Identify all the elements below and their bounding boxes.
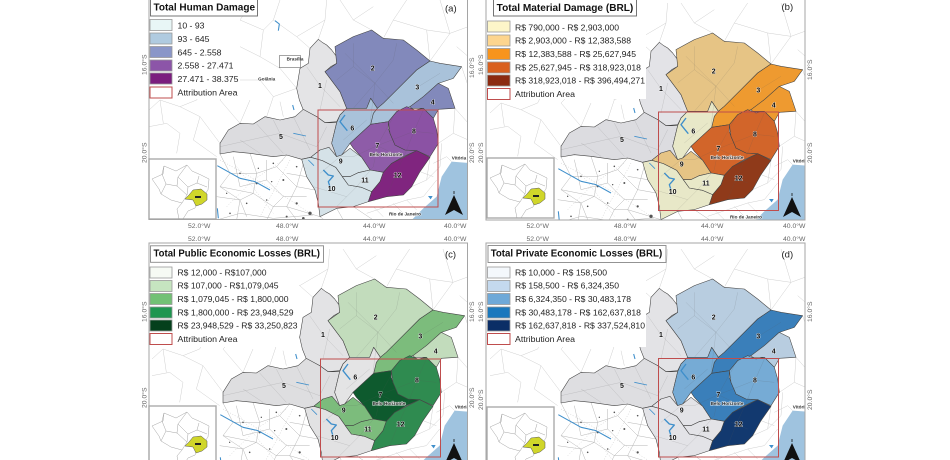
region numbers c: 7 (378, 392, 382, 399)
region numbers b: 6 (691, 129, 695, 136)
axis labels a: 20.0°S (140, 142, 148, 163)
region numbers c: 8 (415, 378, 419, 385)
city labels a (258, 57, 467, 217)
city labels a: Rio de Janeiro (389, 212, 421, 217)
city labels a: Brasília (287, 57, 304, 62)
panel letter b: (b) (782, 2, 793, 13)
title a: Total Human Damage (154, 2, 255, 13)
panel d: total private economic losses (477, 235, 814, 460)
region numbers d: 10 (669, 435, 677, 442)
title b (494, 0, 636, 16)
inset locator b (487, 158, 554, 218)
north arrow d (783, 439, 801, 460)
axis labels c: 16.0°S (468, 301, 476, 322)
axis labels a: 20.0°S (468, 142, 476, 163)
legend d: R$ 10,000 - R$ 158,500 (515, 268, 607, 278)
axis labels a: 16.0°S (468, 57, 476, 78)
axis labels b (477, 54, 814, 230)
legend d: R$ 6,324,350 - R$ 30,483,178 (515, 294, 631, 304)
legend b: R$ 318,923,018 - R$ 396,494,271 (515, 76, 645, 86)
panel c: total public economic losses (140, 235, 476, 460)
region numbers d (620, 315, 776, 442)
city labels b: Rio de Janeiro (730, 215, 762, 220)
legend c: R$ 12,000 - R$107,000 (178, 268, 267, 278)
axis labels d: 40.0°W (783, 235, 806, 243)
region numbers a: 9 (339, 159, 343, 166)
legend c (149, 262, 299, 347)
region numbers d: 11 (702, 426, 710, 433)
region numbers a: 5 (279, 134, 283, 141)
axis labels b: 20.0°S (477, 142, 485, 163)
region numbers d: 4 (772, 348, 776, 355)
region numbers d: 5 (620, 383, 624, 390)
legend c: Attribution Area (178, 334, 238, 344)
region numbers b: 4 (772, 102, 776, 109)
attribution area b (658, 112, 778, 210)
legend a: 10 - 93 (178, 21, 205, 31)
axis labels d: 48.0°W (614, 235, 637, 243)
axis labels a: 48.0°W (276, 222, 299, 230)
region numbers a: 7 (375, 143, 379, 150)
region numbers d: 6 (691, 375, 695, 382)
region numbers c: 2 (374, 315, 378, 322)
axis labels b: 44.0°W (701, 222, 724, 230)
legend d: R$ 30,483,178 - R$ 162,637,818 (515, 307, 641, 317)
axis labels d: 52.0°W (526, 235, 549, 243)
axis labels a (140, 54, 476, 230)
axis labels c: 20.0°S (468, 387, 476, 408)
panel a: total human damage (140, 0, 476, 230)
north arrow b (783, 193, 801, 217)
region numbers d: 1 (659, 332, 663, 339)
axis labels b: 16.0°S (806, 59, 814, 80)
region numbers d: 7 (716, 392, 720, 399)
legend b (486, 0, 646, 100)
title d (488, 246, 666, 262)
region numbers a: 8 (412, 129, 416, 136)
frame c (149, 243, 468, 460)
region numbers a: 2 (371, 66, 375, 73)
legend b: Attribution Area (515, 89, 575, 99)
inset locator a (149, 159, 216, 219)
map d (486, 243, 811, 460)
region numbers c: 6 (353, 375, 357, 382)
city labels a: Vitória (452, 155, 467, 160)
region numbers b: 2 (712, 69, 716, 76)
title b: Total Material Damage (BRL) (497, 3, 633, 14)
axis labels a: 16.0°S (140, 54, 148, 75)
legend d (486, 262, 646, 347)
region numbers c: 11 (364, 426, 372, 433)
region numbers b: 5 (620, 137, 624, 144)
city labels d (711, 401, 808, 409)
legend b: R$ 2,903,000 - R$ 12,383,588 (515, 36, 631, 46)
title c: Total Public Economic Losses (BRL) (154, 248, 320, 260)
city labels d: Belo Horizonte (711, 401, 744, 406)
inset locator c (149, 406, 216, 460)
city labels b (711, 155, 808, 220)
axis labels d: 20.0°S (477, 389, 485, 410)
region numbers c: 10 (331, 435, 339, 442)
legend d: R$ 162,637,818 - R$ 337,524,810 (515, 321, 645, 331)
title c (150, 246, 324, 262)
city labels d: Vitória (793, 404, 808, 409)
north arrow a (445, 191, 463, 215)
region numbers b: 10 (669, 189, 677, 196)
frame b (486, 0, 805, 220)
axis labels b: 20.0°S (806, 142, 814, 163)
region numbers d: 2 (712, 315, 716, 322)
legend d: R$ 158,500 - R$ 6,324,350 (515, 281, 619, 291)
attribution area d (658, 358, 778, 457)
region numbers d: 3 (756, 334, 760, 341)
axis labels a: 44.0°W (363, 222, 386, 230)
region numbers d: 9 (680, 408, 684, 415)
region numbers d: 8 (753, 378, 757, 385)
city labels b: Belo Horizonte (711, 155, 744, 160)
panel letter c: (c) (445, 250, 456, 260)
frame d (486, 243, 805, 460)
legend b: R$ 790,000 - R$ 2,903,000 (515, 22, 619, 32)
legend a: 27.471 - 38.375 (178, 74, 239, 84)
axis labels c: 44.0°W (363, 235, 386, 243)
legend a (149, 0, 240, 99)
map b (486, 0, 811, 225)
region numbers c: 3 (418, 334, 422, 341)
axis labels d (477, 235, 814, 410)
map c (149, 243, 473, 460)
region numbers b: 7 (716, 146, 720, 153)
title d: Total Private Economic Losses (BRL) (491, 248, 662, 260)
attribution area a (318, 110, 438, 207)
legend c: R$ 1,079,045 - R$ 1,800,000 (178, 294, 289, 304)
region fills c (223, 279, 465, 460)
legend a: 93 - 645 (178, 34, 210, 44)
axis labels c: 16.0°S (140, 301, 148, 322)
title a (150, 0, 258, 16)
region numbers b: 11 (702, 180, 710, 187)
region numbers c: 12 (397, 421, 405, 428)
region fills a (220, 30, 462, 217)
region numbers a (279, 66, 435, 193)
inset locator d (487, 407, 554, 460)
region numbers b (620, 69, 776, 196)
panel letter d: (d) (782, 250, 793, 260)
legend c: R$ 23,948,529 - R$ 33,250,823 (178, 321, 298, 331)
region numbers a: 12 (394, 172, 402, 179)
axis labels c: 48.0°W (276, 235, 299, 243)
region numbers b: 3 (756, 88, 760, 95)
city labels c: Belo Horizonte (373, 401, 406, 406)
axis labels c: 20.0°S (140, 387, 148, 408)
region numbers b: 8 (753, 132, 757, 139)
region numbers b: 1 (659, 86, 663, 93)
region numbers c (282, 315, 438, 442)
region numbers d: 12 (735, 421, 743, 428)
legend b: R$ 12,383,588 - R$ 25,627,945 (515, 49, 636, 59)
axis labels d: 44.0°W (701, 235, 724, 243)
axis labels d: 16.0°S (806, 301, 814, 322)
region numbers b: 12 (735, 175, 743, 182)
axis labels b: 52.0°W (526, 222, 549, 230)
axis labels c: 52.0°W (188, 235, 211, 243)
city labels b: Vitória (793, 158, 808, 163)
region fills d (561, 279, 803, 460)
legend c: R$ 1,800,000 - R$ 23,948,529 (178, 307, 294, 317)
axis labels a: 40.0°W (444, 222, 467, 230)
legend b: R$ 25,627,945 - R$ 318,923,018 (515, 62, 641, 72)
axis labels b: 48.0°W (614, 222, 637, 230)
attribution area c (320, 359, 440, 457)
axis labels b: 16.0°S (477, 54, 485, 75)
axis labels d: 20.0°S (806, 389, 814, 410)
north arrow c (445, 439, 463, 460)
region numbers c: 5 (282, 383, 286, 390)
region numbers c: 1 (321, 332, 325, 339)
region numbers a: 3 (415, 85, 419, 92)
city labels c (373, 401, 470, 409)
legend d: Attribution Area (515, 334, 575, 344)
city labels a: Belo Horizonte (370, 152, 403, 157)
city labels c: Vitória (455, 404, 470, 409)
axis labels a: 52.0°W (188, 222, 211, 230)
axis labels b: 40.0°W (783, 222, 806, 230)
city labels a: Goiânia (258, 76, 276, 81)
legend c: R$ 107,000 - R$1,079,045 (178, 281, 279, 291)
region numbers a: 1 (318, 83, 322, 90)
region numbers a: 4 (431, 99, 435, 106)
axis labels c: 40.0°W (444, 235, 467, 243)
region numbers b: 9 (680, 162, 684, 169)
region fills b (561, 33, 803, 220)
axis labels d: 16.0°S (477, 301, 485, 322)
panel b: total material damage (477, 0, 814, 230)
legend a: 2.558 - 27.471 (178, 61, 234, 71)
region numbers c: 9 (342, 408, 346, 415)
region numbers a: 11 (361, 177, 369, 184)
legend a: 645 - 2.558 (178, 47, 222, 57)
region numbers a: 10 (328, 186, 336, 193)
axis labels c (140, 235, 476, 408)
legend a: Attribution Area (178, 87, 238, 97)
panel letter a: (a) (445, 4, 457, 14)
map a (149, 0, 470, 222)
region numbers a: 6 (350, 126, 354, 133)
region numbers c: 4 (434, 348, 438, 355)
frame a (149, 0, 468, 220)
